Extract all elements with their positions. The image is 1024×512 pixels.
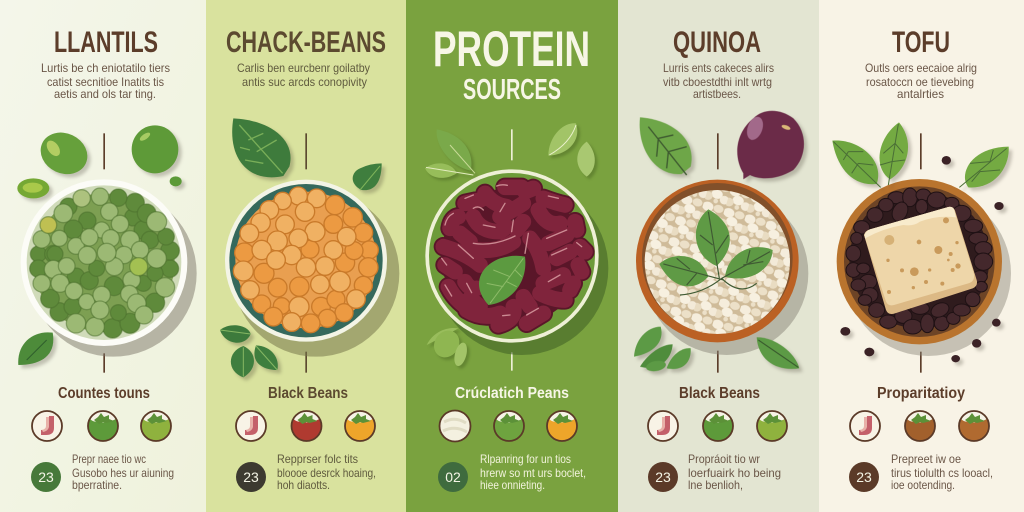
panel: quinoa	[618, 0, 819, 512]
badge: tofu number	[849, 462, 879, 492]
heading: tofu: TOFU	[892, 26, 950, 59]
label: quinoa variety: Black Beans	[679, 385, 760, 402]
text block: quinoa description: artistbees.	[693, 87, 741, 101]
text block: lentils preparation: bperratine.	[72, 478, 122, 492]
text block: chick-beans description: antis suc arcds conopivity	[242, 75, 367, 89]
text block: lentils preparation	[72, 452, 174, 492]
illustration: tofu bowl, beans and leaves	[832, 122, 1011, 373]
text block: protein preparation: hrerw so mt urs boclet,	[480, 466, 586, 480]
icon row: lentils	[32, 411, 171, 441]
panel: lentils	[0, 0, 206, 512]
badge: protein number	[438, 462, 468, 492]
label: tofu variety: Proparitatioy	[877, 385, 965, 402]
text block: quinoa preparation	[688, 452, 781, 492]
text block: tofu preparation: ioe ootending.	[891, 478, 955, 492]
illustration: kidney bean bowl and leaves	[425, 123, 608, 371]
text block: tofu preparation: tirus tiolulth cs looacl,	[891, 466, 993, 480]
badge: tofu number: 23	[856, 469, 872, 485]
text block: lentils description	[41, 61, 170, 101]
heading: chick-beans: CHACK-BEANS	[226, 26, 386, 59]
text block: chick-beans preparation	[277, 452, 376, 492]
text block: tofu preparation: Prepreet iw oe	[891, 452, 961, 466]
label: lentils variety: Countes touns	[58, 385, 150, 402]
text block: tofu description: antalrties	[897, 87, 944, 101]
text block: chick-beans preparation: Repprser folc tits	[277, 452, 358, 466]
text block: tofu description: Outls oers eecaioe alrig	[865, 61, 977, 75]
text block: protein preparation: hiee onnieting.	[480, 478, 545, 492]
illustration: quinoa bowl, leaves and plum	[634, 111, 808, 373]
badge: lentils number: 23	[38, 469, 54, 485]
heading: quinoa: QUINOA	[673, 26, 761, 59]
text block: lentils preparation: Prepr naee tio wc	[72, 452, 146, 466]
text block: chick-beans preparation: bloooe desrck hoaing,	[277, 466, 376, 480]
badge: lentils number	[31, 462, 61, 492]
text block: tofu preparation	[891, 452, 993, 492]
text block: tofu description	[865, 61, 977, 101]
badge: chick-beans number: 23	[243, 469, 259, 485]
panel: chickpeas	[206, 0, 406, 512]
text block: lentils description: aetis and ols tar ting.	[54, 87, 156, 101]
icon row: protein	[440, 410, 577, 442]
badge: quinoa number	[648, 462, 678, 492]
text block: chick-beans description: Carlis ben eurcbenr goilatby	[237, 61, 370, 75]
text block: chick-beans preparation: hoh diaotts.	[277, 478, 330, 492]
text block: quinoa preparation: lne benlioh,	[688, 478, 743, 492]
text block: lentils description: Lurtis be ch eniotatilo tiers	[41, 61, 170, 75]
panel: tofu	[819, 0, 1024, 512]
badge: quinoa number: 23	[655, 469, 671, 485]
text block: tofu description: rosatoccn oe tievebing	[866, 75, 974, 89]
main title	[433, 21, 590, 106]
text block: quinoa description	[663, 61, 774, 101]
label: chick-beans variety: Black Beans	[268, 385, 348, 402]
text block: lentils preparation: Gusobo hes ur aiuning	[72, 466, 174, 480]
heading: lentils: LLANTILS	[54, 26, 158, 59]
label: protein variety: Crúclatich Peans	[455, 385, 569, 402]
main title: PROTEIN	[433, 21, 590, 77]
text block: chick-beans description	[237, 61, 370, 89]
text block: quinoa preparation: loerfuairk ho being	[688, 466, 781, 480]
text block: lentils description: catist secnitioe Inatits tis	[47, 75, 164, 89]
text block: quinoa preparation: Propráoit tio wr	[688, 452, 760, 466]
panel: protein sources	[406, 0, 618, 512]
text block: quinoa description: Lurris ents cakeces alirs	[663, 61, 774, 75]
text block: protein preparation	[480, 452, 586, 492]
text block: protein preparation: Rlpanring for un tios	[480, 452, 571, 466]
badge: protein number: 02	[445, 469, 461, 485]
icon row: quinoa	[648, 411, 787, 441]
text block: quinoa description: vitb cboestdthi inlt wrtg	[663, 75, 772, 89]
icon row: chick-beans	[236, 411, 375, 441]
badge: chick-beans number	[236, 462, 266, 492]
icon row: tofu	[850, 411, 989, 441]
main title: SOURCES	[463, 74, 561, 106]
illustration: chickpea bowl and leaves	[220, 118, 399, 377]
illustration: lentil bowl and garnishes	[17, 125, 197, 373]
